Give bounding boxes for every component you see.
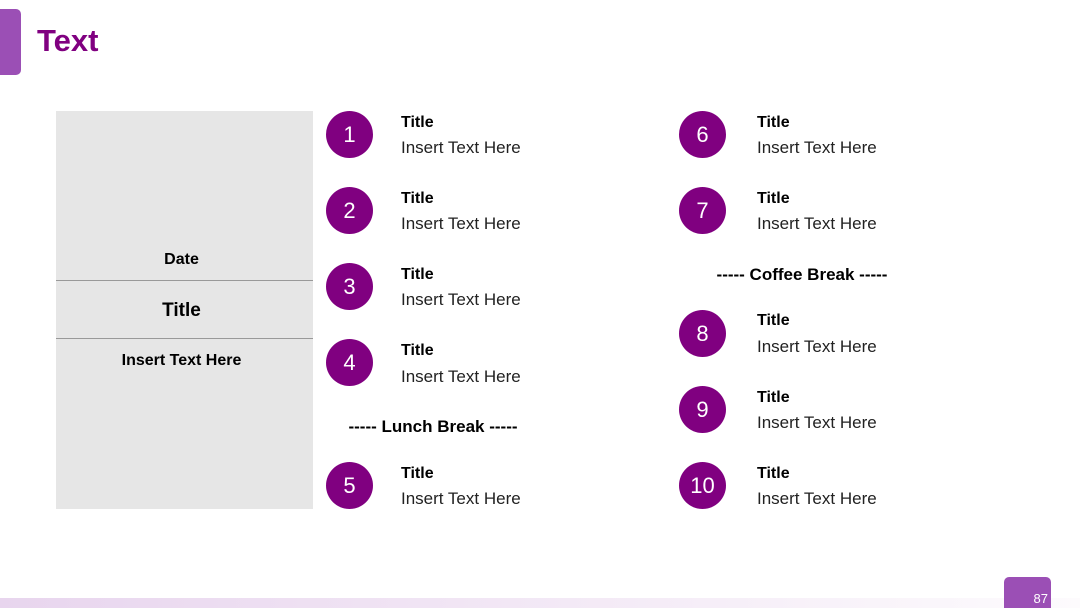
text: 10 xyxy=(690,472,715,498)
text: Insert Text Here xyxy=(757,138,877,157)
text: Title xyxy=(401,190,434,207)
panel: left info xyxy=(56,111,313,509)
text: Insert Text Here xyxy=(401,290,521,309)
text: Title xyxy=(757,312,790,329)
text: Insert Text Here xyxy=(757,413,877,432)
title: Text xyxy=(37,23,98,58)
item 6 xyxy=(679,111,877,158)
text: 6 xyxy=(696,122,709,146)
text: 9 xyxy=(696,396,709,422)
text: Title xyxy=(757,190,790,207)
panel title: Title xyxy=(162,300,201,321)
text: 8 xyxy=(696,320,709,346)
text: Title xyxy=(757,465,790,482)
text: Insert Text Here xyxy=(401,367,521,386)
text: Title xyxy=(401,114,434,131)
text: Insert Text Here xyxy=(757,489,877,508)
item 5 xyxy=(326,462,521,509)
text: 5 xyxy=(343,472,356,498)
text: 7 xyxy=(696,198,709,222)
item 4 xyxy=(326,339,521,386)
lunch break: ----- Lunch Break ----- xyxy=(348,417,518,436)
item 2 xyxy=(326,187,521,234)
item 10 xyxy=(679,462,877,509)
text: Title xyxy=(757,389,790,406)
date: Date xyxy=(164,251,199,268)
coffee break: ----- Coffee Break ----- xyxy=(717,265,887,284)
text: Insert Text Here xyxy=(401,214,521,233)
page number: 87 xyxy=(1034,591,1048,606)
panel text: Insert Text Here xyxy=(122,352,241,369)
header tab xyxy=(0,9,21,75)
item 8 xyxy=(679,310,877,357)
item 9 xyxy=(679,386,877,433)
page number xyxy=(1004,577,1051,608)
item 3 xyxy=(326,263,521,310)
text: Insert Text Here xyxy=(757,337,877,356)
item 1 xyxy=(326,111,521,158)
item 7 xyxy=(679,187,877,234)
text: Insert Text Here xyxy=(401,489,521,508)
text: Title xyxy=(401,465,434,482)
text: 4 xyxy=(343,350,356,374)
text: Insert Text Here xyxy=(757,214,877,233)
text: 3 xyxy=(343,274,356,298)
text: 1 xyxy=(343,122,356,146)
text: Title xyxy=(757,114,790,131)
text: Title xyxy=(401,342,434,359)
text: Title xyxy=(401,266,434,283)
text: Insert Text Here xyxy=(401,138,521,157)
text: 2 xyxy=(343,198,356,222)
